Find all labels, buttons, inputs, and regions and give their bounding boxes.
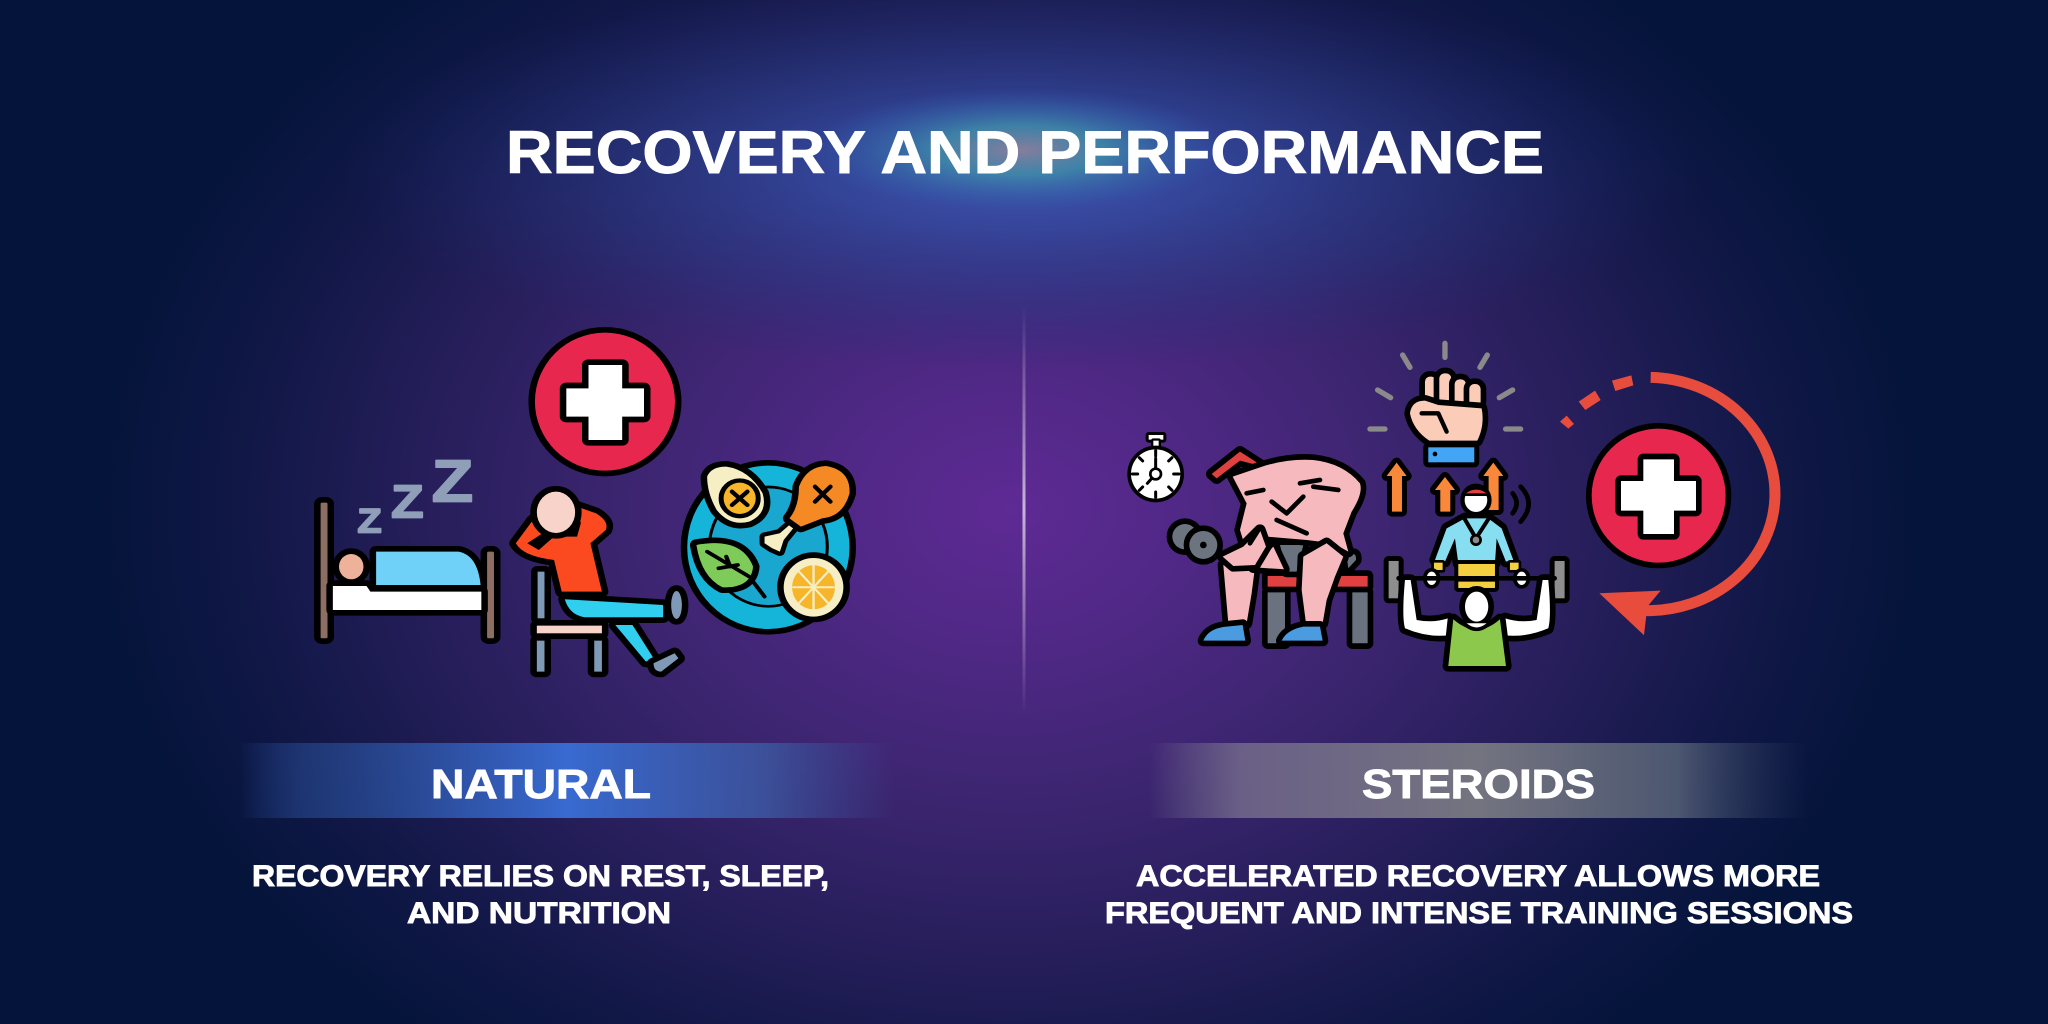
- text: natural description: [252, 860, 829, 930]
- icon: fist with rays: [1370, 343, 1521, 462]
- label band: natural: [240, 743, 895, 818]
- text: steroids description: ACCELERATED RECOVERY ALLOWS MORE: [1136, 860, 1820, 893]
- panel: natural icons: [321, 333, 850, 672]
- text: natural description: RECOVERY RELIES ON REST, SLEEP,: [252, 860, 829, 893]
- icon: three up arrows: [1387, 463, 1503, 512]
- label band: steroids: [1149, 743, 1809, 818]
- panel: steroids icons: [1131, 343, 1565, 666]
- icon: lifter with barbell: [1389, 561, 1565, 666]
- label band: steroids: STEROIDS: [1362, 761, 1595, 807]
- icon: sleeping in bed: Z: [391, 476, 424, 528]
- text: natural description: AND NUTRITION: [407, 897, 671, 930]
- text: steroids description: FREQUENT AND INTENSE TRAINING SESSIONS: [1105, 897, 1853, 930]
- medical cross: [1592, 429, 1726, 563]
- icon: coach with whistle: [1427, 487, 1529, 588]
- title: RECOVERY AND PERFORMANCE: [506, 119, 1544, 186]
- icon: medical cross: [535, 333, 675, 471]
- icon: healthy food plate: [687, 466, 850, 629]
- title glow: [340, 0, 1700, 370]
- icon: sleeping in bed: Z: [357, 501, 382, 540]
- icon: stopwatch: [1131, 435, 1180, 499]
- text: steroids description: [1105, 860, 1853, 930]
- label band: natural: NATURAL: [431, 761, 651, 807]
- icon: muscular man with dumbbell: [1172, 452, 1368, 643]
- recovery arrow: [1560, 375, 1775, 635]
- icon: cross with recovery arrow: [1560, 375, 1775, 635]
- icon: person resting on chair: [516, 492, 682, 672]
- icon: sleeping in bed: [321, 448, 494, 638]
- icon: sleeping in bed: Z: [432, 448, 473, 515]
